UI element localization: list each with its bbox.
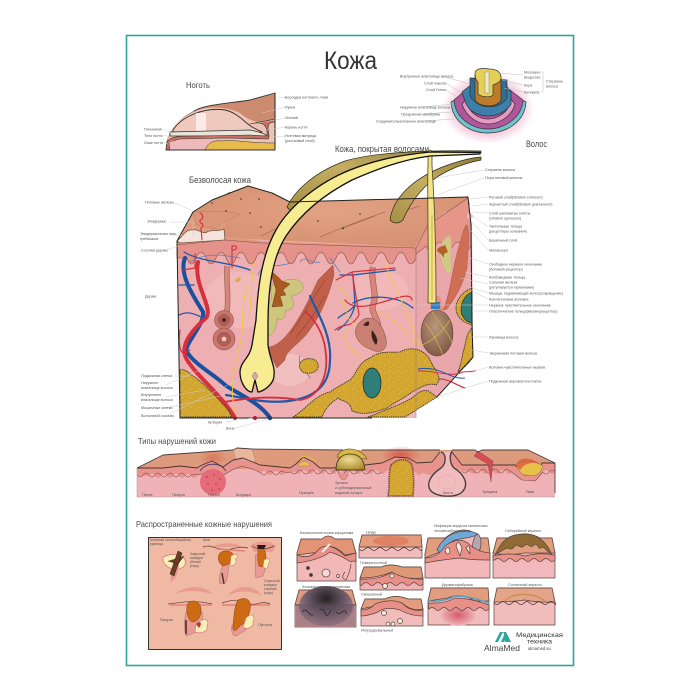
disorder block labels: человека(бородавка): [434, 529, 470, 533]
nail labels: [144, 96, 329, 145]
disorder block labels: Солнечный кератоз: [508, 583, 542, 587]
nail labels: Лунка: [285, 106, 296, 110]
left labels of skin block: Эпидермальная нить: [140, 232, 177, 236]
disorder block labels: Себорейный кератоз: [505, 529, 541, 533]
heading: hairless skin: Безволосая кожа: [189, 175, 251, 185]
left labels of skin block: Волосяной сосочек: [141, 414, 174, 418]
right labels of skin block: (рецепторы осязания): [489, 230, 527, 234]
sweat gland right: [372, 267, 378, 330]
hair labels: Мозговое: [524, 70, 540, 74]
right labels of skin block: Колбовидные тельца: [489, 276, 526, 280]
hair labels: Наружное влагалище волоса: [400, 106, 451, 110]
nerves: [232, 260, 448, 415]
disorder block labels: Инфекция вирусом папилломы: [434, 524, 488, 528]
panel: acne: Открытый: [264, 579, 280, 583]
halo of furuncle: [381, 446, 421, 464]
disorder block: nevus: [359, 535, 422, 558]
ulcer: [516, 461, 543, 476]
left labels of skin block: Мышечные клетки: [141, 406, 172, 410]
hair cross-section diagram: [442, 69, 534, 144]
hair follicle right: [421, 310, 453, 356]
nodule: [200, 469, 226, 495]
right labels of skin block: Роговой слой(Stratum corneum): [489, 196, 543, 200]
hair labels: [376, 70, 563, 124]
right labels of skin block: Подкожная жировая клетчатка: [489, 380, 542, 384]
cyst: [429, 451, 466, 496]
sebaceous gland: [263, 279, 303, 336]
hair labels: Слой Генле: [426, 88, 446, 92]
panel: acne: угорь): [190, 564, 199, 568]
panel: acne: (белый: [190, 560, 201, 564]
lesion labels: Трещина: [482, 490, 498, 494]
teal follicle ovals: [363, 368, 381, 398]
lesion labels: водяной пузырь: [335, 491, 362, 495]
right labels of skin block: Эккриновая потовая железа: [489, 352, 538, 356]
panel: acne: комедон: [264, 583, 277, 587]
fat lobes: [180, 288, 473, 417]
right labels of skin block: Нервное чувствительное окончание: [489, 304, 551, 308]
sebaceous right: [440, 236, 452, 274]
right labels of skin block: (регулируется гормонами): [489, 286, 534, 290]
lesion labels: Волдырь: [236, 493, 251, 497]
disorder block labels: Дерматофиброма: [442, 583, 474, 587]
hair labels: Слой Хаксли: [424, 82, 446, 86]
disorder block labels: [300, 524, 542, 632]
surface pores: [211, 192, 401, 229]
logo: AlmaMed: Медицинская: [516, 632, 563, 639]
disorder block labels: Смешанный: [361, 592, 382, 596]
lesion labels: Киста: [443, 491, 454, 495]
heading: lesion types: Типы нарушений кожи: [138, 436, 216, 446]
disorder block: basal cell carcinoma: [297, 536, 356, 581]
nail labels: Тело ногтя: [144, 134, 162, 138]
disorder block labels: Интрадермальный: [361, 628, 393, 632]
epidermis: [137, 452, 444, 478]
panel: acne: Пустула: [258, 623, 273, 627]
blood vessels: [179, 213, 465, 418]
left labels of skin block: Эпидермис: [147, 220, 167, 224]
panel: acne: Закрытый: [190, 552, 205, 556]
lesion labels: Папула: [172, 493, 186, 497]
nail labels: Бороздка ногтевого ложа: [285, 96, 329, 100]
disorder block labels: Злокачественная меланома: [302, 585, 351, 589]
right labels of skin block: Мышца, поднимающая волос(сокращение): [489, 292, 563, 296]
left labels of skin block: Подкожная клетка: [141, 374, 173, 378]
nail labels: Корень ногтя: [285, 126, 307, 130]
nail labels: Ногтевая матрица: [285, 134, 317, 138]
lesion labels: Нарост: [208, 493, 221, 497]
hair labels: волоса: [546, 84, 559, 88]
bulla: [337, 449, 367, 459]
nail labels: Гипоникий: [144, 128, 162, 132]
panel: acne: Акне: [203, 538, 210, 542]
dermis: [177, 200, 473, 418]
halos: [175, 542, 276, 596]
title: Кожа: [324, 47, 377, 75]
disorder block labels: Поверхностный: [360, 561, 387, 565]
right labels of skin block: Свободное нервное окончание: [489, 262, 542, 266]
left labels of skin block: Вена: [226, 426, 236, 430]
disorder block: solar keratosis: [494, 588, 556, 625]
follicle 4: [184, 612, 203, 636]
panel: acne: единица: [150, 542, 163, 546]
disorder block: mixed: [361, 596, 423, 626]
heading: nail: Ноготь: [186, 80, 211, 90]
left labels of skin block: Артерия: [208, 420, 222, 424]
disorder block: superficial melanoma: [360, 565, 423, 590]
strip outline: [137, 448, 555, 493]
follicle 2: [219, 563, 228, 584]
heading: hair: Волос: [526, 139, 547, 149]
long tan hair left: [287, 151, 481, 210]
right labels of skin block: Стержень волоса: [485, 168, 516, 172]
epidermis band with pegs: [177, 240, 416, 264]
right labels of skin block: Базальный слой: [489, 238, 517, 242]
disorder block labels: Невус: [366, 530, 376, 534]
lesion labels: Язва: [526, 490, 535, 494]
panel: acne: угорь): [264, 591, 273, 595]
right labels of skin block: Тактильные тельца: [489, 224, 523, 228]
panel: acne: (черный: [264, 587, 277, 591]
nail labels: Эпоний: [285, 116, 298, 120]
left labels of skin block: Наружное: [141, 381, 158, 385]
lesion labels: Пятна: [142, 493, 153, 497]
lesion labels: [142, 481, 535, 497]
disorder block: dermatofibroma: [428, 588, 489, 626]
right labels of skin block: Сальная железа: [489, 280, 518, 284]
right labels of skin block: Слой шиповатых клеток: [489, 212, 531, 216]
dermis mottling: [204, 272, 276, 328]
lesion types strip: [137, 446, 555, 497]
right labels of skin block: Зернистый слой(Stratum granulosum): [489, 202, 552, 206]
right labels of skin block: Луковица волоса: [489, 336, 519, 340]
epidermis lines: [137, 452, 555, 475]
disorder block: malignant melanoma: [295, 586, 356, 627]
sweat gland left: [224, 266, 230, 312]
skin surface: [137, 448, 555, 469]
left labels of skin block: гребешков: [140, 237, 158, 241]
dermis front: [137, 468, 555, 497]
hair labels: Соединительнотканное влагалище: [376, 120, 436, 124]
right labels of skin block: Меланоцит: [489, 248, 509, 252]
hair shaft right: [428, 150, 436, 303]
long tan hair right: [390, 157, 481, 223]
main hair: [240, 152, 480, 392]
halo of nodule: [199, 450, 227, 466]
vesicle: [298, 462, 310, 466]
arrector pili muscle: [269, 265, 334, 368]
logo: AlmaMed: техника: [527, 638, 552, 646]
muscle right: [443, 225, 469, 310]
panel: acne: Папула: [160, 618, 174, 622]
epidermis: hairless part with white bumps: [177, 229, 225, 243]
panel: acne: [148, 538, 282, 650]
heading: hairy skin: Кожа, покрытая волосами: [335, 144, 429, 155]
lesion labels: Пузырёк: [299, 491, 314, 495]
nail labels: (ростковый слой): [285, 139, 315, 143]
follicle 3: [255, 551, 266, 578]
lower vessel ends: [253, 416, 257, 420]
right labels of skin block: Пластинчатые тельца(механорецептор): [489, 310, 557, 314]
hair labels: Кора: [524, 84, 533, 88]
page frame: [126, 36, 574, 666]
hair labels: Внутреннее влагалище волоса: [400, 74, 454, 78]
follicle 5: [232, 620, 246, 636]
logo: AlmaMed: AlmaMed: [484, 643, 520, 653]
skin surface: [193, 186, 470, 247]
fissure: [474, 451, 493, 482]
disorder block: viral infection: [425, 530, 490, 578]
hair labels: Прозрачная мембрана: [401, 112, 441, 116]
disorder block: seborrheic keratosis: [493, 534, 555, 578]
hair labels: вещество: [524, 76, 541, 80]
hair labels: Кутикула: [524, 90, 540, 94]
main skin block: [177, 150, 481, 420]
left labels of skin block: Потовые железы: [145, 200, 174, 204]
right labels of skin block: (болевой рецептор): [489, 268, 523, 272]
logo: AlmaMed: [484, 632, 563, 653]
right labels of skin block: Волокна чувствительных нервов: [489, 366, 545, 370]
hair labels: Стержень: [546, 80, 563, 84]
logo: AlmaMed: almamed.su: [528, 646, 551, 651]
left labels of skin block: Дерма: [145, 294, 157, 298]
left labels of skin block: влагалище волоса: [141, 398, 174, 402]
nail diagram: [166, 93, 275, 150]
heading: common disorders: Распространенные кожные нарушения: [136, 519, 272, 529]
right labels of skin block: (Stratum spinosum): [489, 216, 521, 220]
left labels of skin block: [140, 200, 268, 430]
labels: Активная пилосебацейная: [150, 538, 191, 542]
nail labels: Ложе ногтя: [144, 141, 163, 145]
disorder block labels: Базальноклеточная карцинома: [300, 531, 354, 535]
lesion labels: и субэпидермальный: [335, 486, 371, 490]
right labels of skin block: [415, 168, 563, 396]
fat column: [388, 460, 414, 496]
follicle 1: [163, 554, 185, 570]
left labels of skin block: влагалище волоса: [141, 386, 174, 390]
left labels of skin block: Сосочки дермы: [141, 248, 168, 252]
block outline: [177, 186, 473, 418]
lesion labels: Эрозия: [335, 481, 347, 485]
wheal on surface: [233, 448, 256, 462]
left labels of skin block: Внутреннее: [141, 393, 161, 397]
right labels of skin block: Коллагеновые волокна: [489, 298, 529, 302]
right labels of skin block: Пора потовой железы: [485, 176, 523, 180]
panel: acne: комедон: [190, 556, 203, 560]
